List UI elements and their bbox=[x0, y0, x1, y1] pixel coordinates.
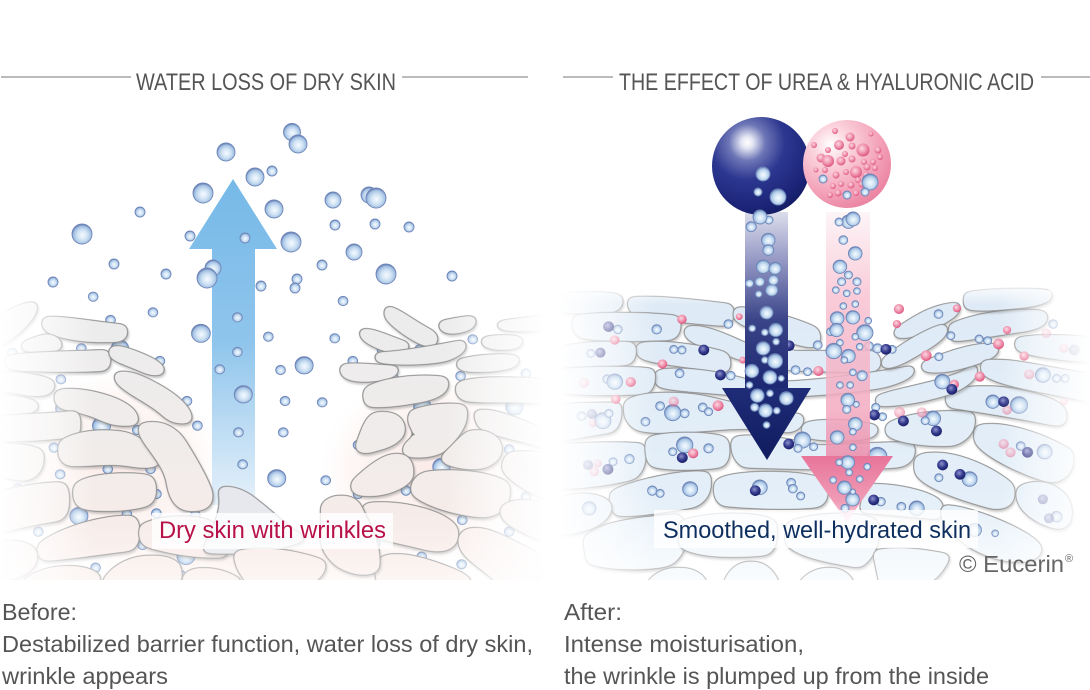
caption: after bbox=[564, 599, 989, 689]
arrow: navy urea moving down bbox=[722, 212, 811, 460]
navy urea spheres bbox=[583, 321, 1080, 523]
fades at panel edges bbox=[544, 285, 1090, 600]
background glow of damaged skin bbox=[0, 365, 545, 600]
label: dry skin with wrinkles: Dry skin with wrinkles bbox=[159, 517, 386, 544]
caption: after: the wrinkle is plumped up from the inside bbox=[564, 663, 989, 689]
smooth hydrated skin cells bbox=[558, 290, 1090, 585]
copyright: Eucerin: ® bbox=[1065, 553, 1073, 565]
sphere: navy urea bbox=[712, 117, 810, 215]
panel: the effect of urea and hyaluronic acid bbox=[544, 69, 1090, 689]
label: smoothed, well-hydrated skin: Smoothed, well-hydrated skin bbox=[663, 517, 971, 544]
dry skin cells with bubbles between them bbox=[0, 292, 547, 583]
arrow: pink hyaluronic acid moving down bbox=[801, 212, 893, 522]
water bubbles escaping above skin bbox=[48, 124, 457, 293]
bubbles travelling down arrows bbox=[745, 215, 873, 512]
panel: water loss of dry skin bbox=[0, 69, 560, 689]
arrow: water moving upward bbox=[189, 179, 277, 505]
bubbles within skin layers bbox=[7, 292, 531, 580]
bubbles on spheres bbox=[753, 167, 878, 226]
skin cell shapes bbox=[558, 290, 1090, 585]
caption: before: Before: bbox=[2, 599, 77, 625]
fades at panel edges bbox=[0, 290, 560, 640]
caption: after: After: bbox=[564, 599, 622, 625]
caption: before bbox=[1, 599, 533, 689]
caption: before: wrinkle appears bbox=[1, 663, 168, 689]
caption: before: Destabilized barrier function, water loss of dry skin, bbox=[2, 631, 533, 657]
sphere: pink hyaluronic acid bbox=[803, 120, 891, 208]
heading: water loss: WATER LOSS OF DRY SKIN bbox=[136, 69, 396, 96]
caption: after: Intense moisturisation, bbox=[564, 631, 804, 657]
label: smoothed, well-hydrated skin bbox=[654, 510, 978, 548]
pink hyaluronic acid spheres bbox=[579, 304, 1069, 476]
copyright: Eucerin: © Eucerin bbox=[959, 551, 1064, 577]
skin cell shapes bbox=[0, 303, 547, 583]
hydrating bubbles in cells bbox=[577, 310, 1069, 537]
